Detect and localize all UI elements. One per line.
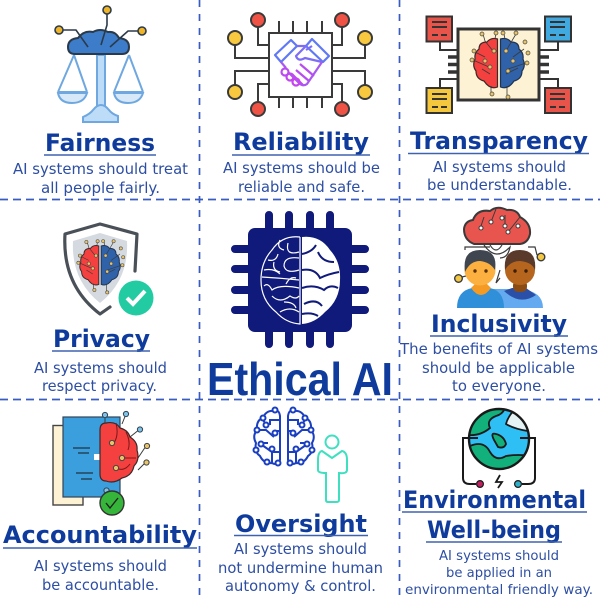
icon: two people with brain cloud [455,208,545,308]
text: inclusivity description: should be applicable [422,359,575,377]
text: accountability description: be accountable. [42,576,159,594]
text: oversight description: autonomy & control. [225,577,376,595]
icon: circuit brain outline [254,408,314,466]
text: reliability description: reliable and safe. [238,178,365,196]
icon: person outline [318,436,347,502]
text: environmental description [405,548,593,598]
text: accountability description: AI systems should [34,557,167,575]
heading: Environmental Well-being [402,486,587,544]
text: fairness description: all people fairly. [41,179,160,197]
heading: Privacy: Privacy [53,325,150,353]
text: inclusivity description [399,340,598,395]
icon: brain in frame with documents [426,16,571,113]
text: oversight description: not undermine human [218,559,383,577]
text: transparency description: AI systems should [433,158,566,176]
text: privacy description: respect privacy. [42,377,157,395]
text: reliability description: AI systems should be [223,159,380,177]
heading: Inclusivity: Inclusivity [431,310,567,338]
icon: scales with cloud [55,6,146,122]
text: reliability description [223,159,380,196]
text: inclusivity description: The benefits of AI systems [399,340,598,358]
text: transparency description [427,158,572,194]
text: oversight description: AI systems should [234,540,367,558]
heading: Reliability: Reliability [233,128,369,156]
panel: inclusivity [399,208,598,395]
text: transparency description: be understandable. [427,176,572,194]
title: Ethical AI: Ethical AI [207,353,393,405]
text: oversight description [218,540,383,595]
panel: fairness [13,6,188,197]
heading: Transparency: Transparency [410,127,588,155]
icon: circuit chip handshake [228,13,372,116]
text: privacy description [34,359,167,395]
panel: accountability [3,411,197,594]
panel: transparency [408,16,589,194]
text: environmental description: be applied in an [446,565,552,581]
text: environmental description: AI systems should [439,548,559,564]
icon: shield with brain and check [65,224,154,316]
text: environmental description: environmental friendly way. [405,582,593,598]
text: inclusivity description: to everyone. [452,377,546,395]
panel: oversight [218,408,383,595]
text: accountability description [34,557,167,594]
heading: Fairness: Fairness [45,129,155,157]
heading: Accountability: Accountability [3,521,197,549]
panel: environmental well-being [402,402,593,598]
text: fairness description [13,160,188,197]
text: fairness description: AI systems should treat [13,160,188,178]
icon: chip with brain [235,215,365,344]
panel: ethical AI centre [207,215,393,405]
icon: globe with circuit [462,402,535,488]
panel: privacy [34,224,167,395]
heading: Oversight: Oversight [235,510,367,538]
panel: reliability [223,13,380,196]
heading: Environmental Well-being: Well-being [427,516,561,544]
icon: document with brain and check [53,411,150,515]
text: privacy description: AI systems should [34,359,167,377]
heading: Environmental Well-being: Environmental [403,486,586,514]
